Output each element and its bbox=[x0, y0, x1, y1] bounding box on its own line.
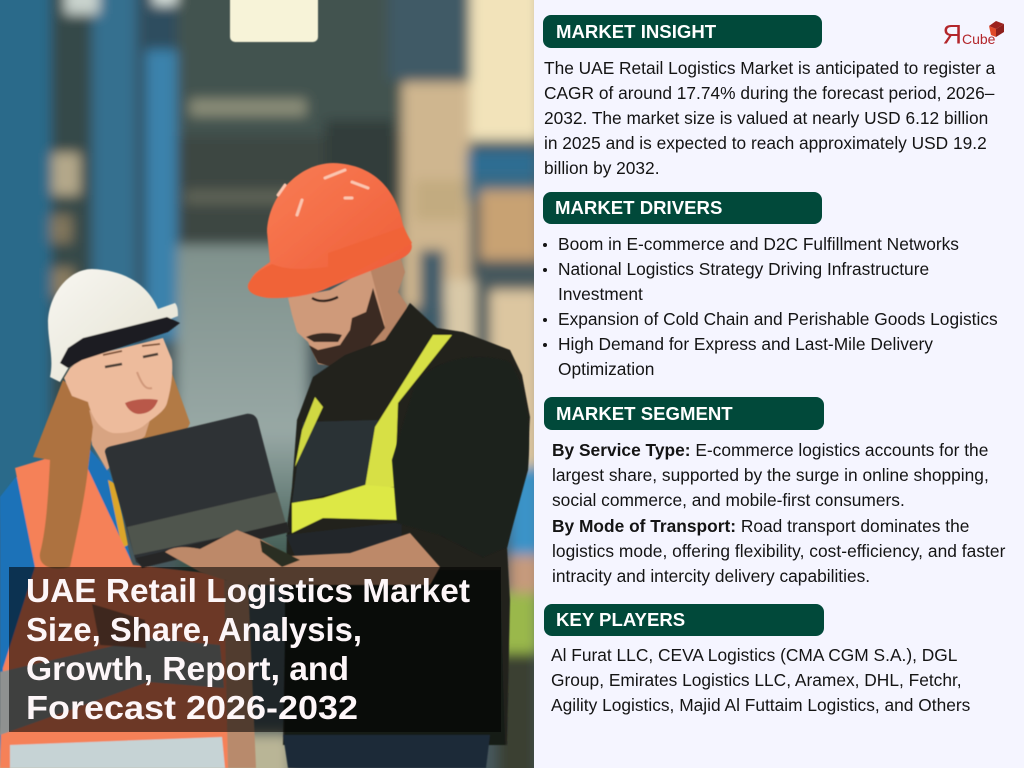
tablet bbox=[105, 357, 529, 585]
title: UAE Retail Logistics Market bbox=[26, 572, 470, 609]
reflective band lower bbox=[10, 737, 225, 768]
jeans bbox=[283, 735, 490, 768]
yellow band bbox=[292, 485, 403, 533]
text: market segment details: social commerce, and mobile-first consumers. bbox=[552, 490, 905, 510]
ear and neck bbox=[335, 256, 407, 372]
yellow strap right bbox=[365, 335, 452, 487]
heading: key players bbox=[544, 604, 824, 636]
text: key players list bbox=[551, 644, 970, 714]
title bbox=[26, 572, 470, 726]
face bbox=[288, 268, 385, 368]
mustache bbox=[306, 333, 342, 342]
helmet band bbox=[60, 317, 180, 368]
yellow strap left bbox=[295, 397, 323, 467]
helmet highlights bbox=[278, 170, 368, 215]
heading: key players: KEY PLAYERS bbox=[556, 609, 685, 630]
list: market drivers: Optimization bbox=[558, 358, 654, 378]
list: market drivers: Expansion of Cold Chain and Perishable Goods Logistics bbox=[558, 308, 998, 328]
heading: market insight: MARKET INSIGHT bbox=[556, 21, 716, 42]
text: market insight summary bbox=[544, 58, 996, 178]
title: Forecast 2026-2032 bbox=[26, 689, 358, 726]
orange vest bbox=[0, 458, 228, 768]
list: market drivers: Boom in E-commerce and D2C Fulfillment Networks bbox=[558, 234, 959, 254]
text: market segment details: largest share, supported by the surge in online shopping, bbox=[552, 464, 989, 484]
text: key players list: Agility Logistics, Majid Al Futtaim Logistics, and Others bbox=[551, 694, 970, 714]
text: market insight summary: 2032. The market size is valued at nearly USD 6.12 billion bbox=[544, 108, 988, 128]
heading: market insight bbox=[543, 15, 822, 48]
neck bbox=[88, 410, 150, 470]
text: market insight summary: billion by 2032. bbox=[544, 158, 660, 178]
logo: RCube bbox=[942, 20, 1004, 50]
eyes and brows bbox=[105, 354, 158, 367]
text: market insight summary: in 2025 and is expected to reach approximately USD 19.2 bbox=[544, 132, 987, 152]
text: market insight summary: CAGR of around 17.74% during the forecast period, 2026– bbox=[544, 82, 994, 102]
text: market segment details: By Mode of Transport: Road transport dominates the bbox=[552, 516, 969, 536]
face bbox=[64, 338, 172, 433]
tablet corner under hand bbox=[260, 540, 300, 567]
black shirt torso bbox=[283, 303, 530, 745]
torso mesh vest bbox=[292, 420, 378, 503]
reflective band bbox=[0, 638, 224, 735]
text: key players list: Group, Emirates Logistics LLC, Aramex, DHL, Fetchr, bbox=[551, 670, 962, 690]
text: market segment details: By Service Type: E-commerce logistics accounts for the bbox=[552, 440, 988, 460]
hair behind bbox=[70, 340, 190, 440]
list: market drivers: High Demand for Express and Last-Mile Delivery bbox=[558, 334, 933, 354]
text: market segment details: logistics mode, offering flexibility, cost-efficiency, and faster bbox=[552, 540, 1005, 560]
heading: market segment bbox=[544, 397, 824, 430]
title: Growth, Report, and bbox=[26, 650, 349, 687]
photo: two logistics workers reviewing a tablet in a warehouse bbox=[0, 0, 534, 768]
heading: market drivers bbox=[543, 192, 822, 224]
list: market drivers: Investment bbox=[558, 284, 643, 304]
logo: RCube: Cube bbox=[962, 31, 996, 47]
man sleeve bbox=[392, 357, 529, 557]
warehouse background bbox=[0, 0, 560, 768]
title overlay band bbox=[9, 567, 501, 732]
lips bbox=[125, 399, 158, 414]
hair long bbox=[33, 380, 93, 569]
logo: RCube: Я bbox=[942, 20, 962, 50]
text: market segment details: intracity and intercity delivery capabilities. bbox=[552, 566, 870, 586]
helmet bbox=[248, 163, 412, 298]
list: market drivers bbox=[543, 234, 998, 378]
blue shirt bbox=[0, 447, 140, 768]
text: market insight summary: The UAE Retail Logistics Market is anticipated to register a bbox=[544, 58, 995, 78]
helmet bbox=[48, 269, 178, 382]
list: market drivers: National Logistics Strategy Driving Infrastructure bbox=[558, 258, 929, 278]
heading: market segment: MARKET SEGMENT bbox=[556, 403, 733, 424]
man worker with orange helmet bbox=[248, 163, 530, 768]
ceiling light bbox=[230, 0, 318, 42]
woman worker with white helmet bbox=[0, 269, 256, 768]
woman hand and arm bbox=[92, 604, 146, 648]
beard bbox=[309, 288, 385, 369]
man hand and forearm bbox=[165, 530, 440, 585]
text: key players list: Al Furat LLC, CEVA Logistics (CMA CGM S.A.), DGL bbox=[551, 644, 957, 664]
eye bbox=[312, 297, 338, 301]
title: Size, Share, Analysis, bbox=[26, 611, 362, 648]
heading: market drivers: MARKET DRIVERS bbox=[555, 197, 722, 218]
text: market segment details bbox=[552, 440, 1006, 586]
